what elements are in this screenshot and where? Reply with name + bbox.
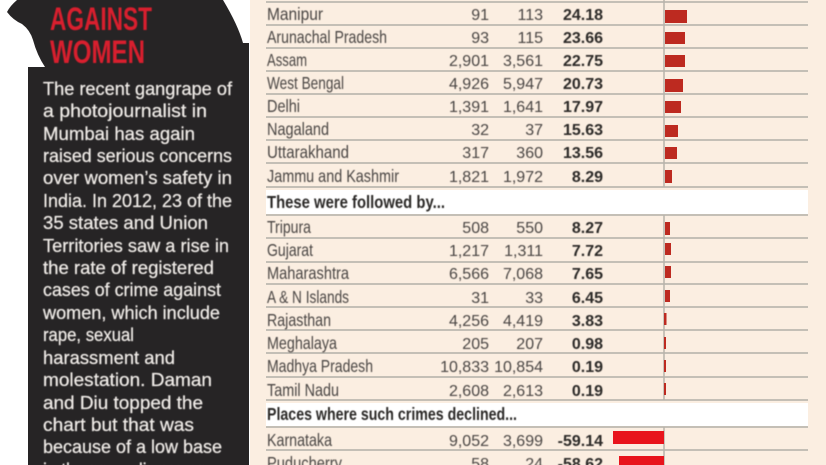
section: smaller risers: Meghalaya — [267, 333, 337, 353]
section: top risers: 93 — [471, 30, 489, 47]
section: top risers: 15.63 — [563, 122, 603, 139]
section: top risers: 24.18 — [563, 7, 603, 24]
text block: intro: the rate of registered — [43, 257, 214, 278]
section: smaller risers: 2,613 — [503, 383, 543, 400]
section bands — [266, 190, 808, 427]
text block: intro: over women’s safety in — [43, 167, 232, 188]
section: declines: Karnataka — [267, 430, 332, 450]
heading: declines: Places where such crimes declined... — [267, 404, 517, 424]
section: smaller risers: Tripura — [267, 217, 311, 237]
section: smaller risers: 3.83 — [572, 313, 603, 330]
section: top risers: 37 — [525, 122, 543, 139]
section: smaller risers: Rajasthan — [267, 310, 331, 330]
section: smaller risers: 207 — [516, 336, 543, 353]
section: top risers: 4,926 — [449, 76, 489, 93]
section: top risers: 32 — [471, 122, 489, 139]
text block: intro: Mumbai has again — [43, 123, 195, 144]
section: top risers: 5,947 — [503, 76, 543, 93]
text block: intro: harassment and — [43, 347, 175, 368]
section: smaller risers: 6,566 — [449, 266, 489, 283]
section: top risers: Assam — [267, 50, 307, 70]
text block: intro: India. In 2012, 23 of the — [43, 190, 232, 211]
heading: followed by: These were followed by... — [267, 192, 445, 212]
text block: intro: a photojournalist in — [43, 100, 207, 121]
section: top risers: 113 — [517, 7, 543, 24]
section: top risers: Nagaland — [267, 119, 329, 139]
section: smaller risers: Maharashtra — [267, 263, 349, 283]
section: top risers: West Bengal — [267, 73, 344, 93]
section: smaller risers: 205 — [462, 336, 489, 353]
section: top risers: 17.97 — [563, 99, 603, 116]
section: top risers: 360 — [516, 145, 543, 162]
section: top risers: 13.56 — [563, 145, 603, 162]
section: top risers: 20.73 — [563, 76, 603, 93]
text block: intro — [42, 78, 233, 465]
section: smaller risers: 4,256 — [449, 313, 489, 330]
section: declines — [267, 430, 603, 465]
table: states and crime figures — [267, 4, 603, 465]
text block: intro: rape, sexual — [43, 324, 134, 345]
section: top risers: 2,901 — [449, 53, 489, 70]
section: smaller risers — [267, 217, 603, 400]
text block: intro: raised serious concerns — [43, 145, 232, 166]
title: WOMEN — [50, 34, 145, 70]
section: top risers: 1,641 — [503, 99, 543, 116]
section: smaller risers: A & N Islands — [267, 287, 349, 307]
section: top risers: 317 — [462, 145, 489, 162]
section: top risers: Arunachal Pradesh — [267, 27, 387, 47]
text block: intro: Territories saw a rise in — [43, 235, 229, 256]
section: smaller risers: 33 — [525, 290, 543, 307]
section: smaller risers: 31 — [471, 290, 489, 307]
section: smaller risers: 508 — [462, 220, 489, 237]
section: smaller risers: Gujarat — [267, 240, 313, 260]
section: smaller risers: 7.72 — [572, 243, 603, 260]
section: top risers: Uttarakhand — [267, 142, 349, 162]
section: top risers: Delhi — [267, 96, 300, 116]
section: top risers: 3,561 — [503, 53, 543, 70]
section: smaller risers: 7.65 — [572, 266, 603, 283]
text block: intro: The recent gangrape of — [43, 78, 233, 99]
section: smaller risers: 10,854 — [494, 359, 543, 376]
section: top risers: Jammu and Kashmir — [267, 166, 399, 186]
text block: intro: because of a low base — [43, 436, 222, 457]
section: smaller risers: 0.19 — [572, 359, 603, 376]
section: declines: -59.14 — [558, 433, 603, 450]
section: declines: 9,052 — [449, 433, 489, 450]
text block: intro: molestation. Daman — [43, 369, 212, 390]
section: top risers: 8.29 — [572, 169, 603, 186]
title — [50, 1, 152, 70]
text block: intro: women, which include — [42, 302, 220, 323]
section: smaller risers: 6.45 — [572, 290, 603, 307]
panel: dark silhouette sidebar — [7, 0, 249, 465]
text block: intro: and Diu topped the — [43, 392, 203, 413]
text block: intro: chart but that was — [43, 414, 194, 435]
text block: intro: 35 states and Union — [43, 212, 208, 233]
section: top risers: 115 — [517, 30, 543, 47]
section: top risers: 1,391 — [449, 99, 489, 116]
section: smaller risers: 10,833 — [440, 359, 489, 376]
section: smaller risers: 8.27 — [572, 220, 603, 237]
section: top risers: 1,821 — [449, 169, 489, 186]
section: smaller risers: 7,068 — [503, 266, 543, 283]
bar chart: percentage change — [613, 10, 687, 465]
section: smaller risers: 2,608 — [449, 383, 489, 400]
section: top risers: Manipur — [267, 4, 323, 24]
section: smaller risers: 0.19 — [572, 383, 603, 400]
section: top risers: 22.75 — [563, 53, 603, 70]
section: smaller risers: 4,419 — [503, 313, 543, 330]
section: top risers: 23.66 — [563, 30, 603, 47]
title: AGAINST — [50, 1, 152, 37]
section: smaller risers: Madhya Pradesh — [267, 356, 373, 376]
section: smaller risers: Tamil Nadu — [267, 380, 339, 400]
section: smaller risers: 550 — [516, 220, 543, 237]
section: smaller risers: 1,217 — [449, 243, 489, 260]
section: smaller risers: 0.98 — [572, 336, 603, 353]
text block: intro: cases of crime against — [43, 279, 221, 300]
section: declines: 3,699 — [503, 433, 543, 450]
section: smaller risers: 1,311 — [504, 243, 543, 260]
section: top risers — [267, 4, 603, 186]
panel: table background — [250, 0, 826, 465]
section: top risers: 1,972 — [503, 169, 543, 186]
section: top risers: 91 — [471, 7, 489, 24]
